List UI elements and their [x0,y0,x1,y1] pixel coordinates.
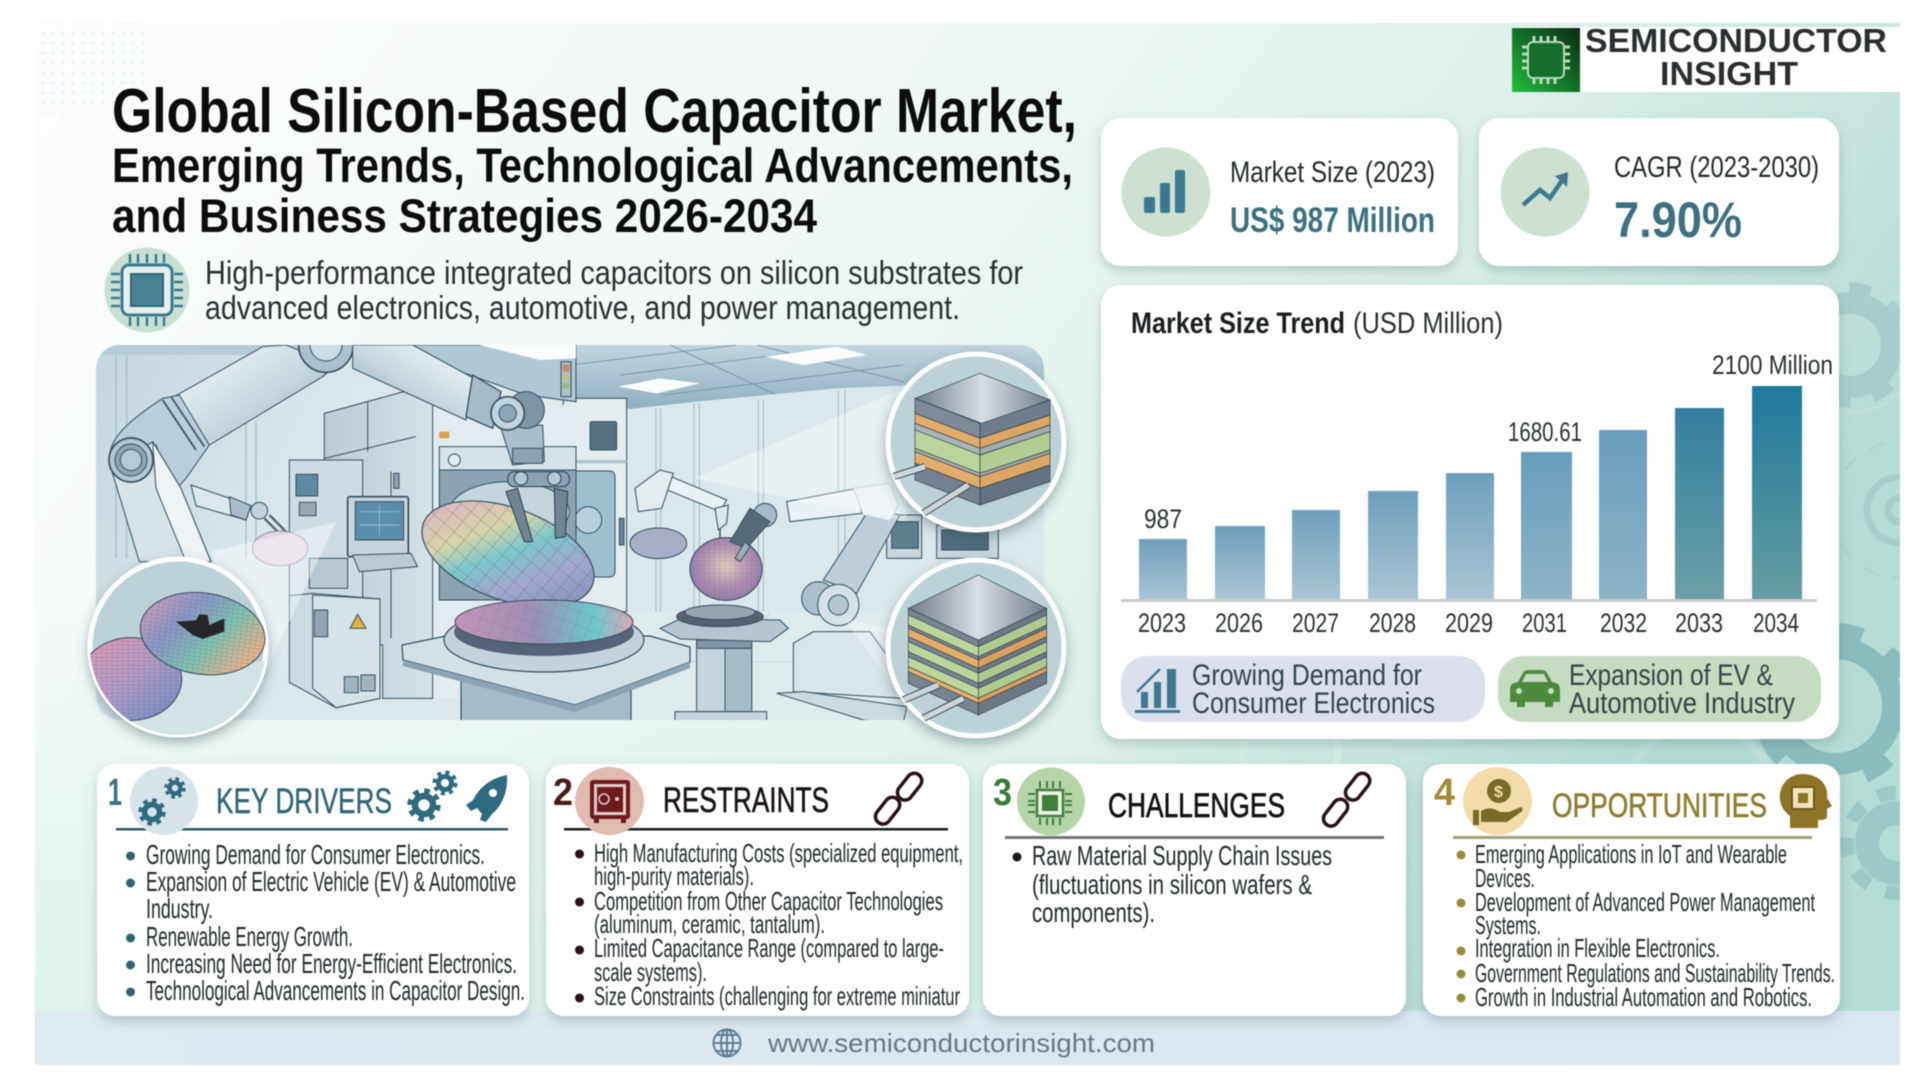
year labels: 2027 [1292,608,1339,638]
year labels: 2031 [1522,608,1567,638]
title: Global Silicon-Based Capacitor Market, [112,77,1077,146]
logo: Semiconductor Insight [1512,22,1900,92]
restraint list [575,838,963,1011]
opportunity list: Integration in Flexible Electronics. [1475,933,1720,963]
magnifier: capacitor layer stack 1 [888,354,1064,530]
icon: chip in circle [104,248,190,332]
icon: bars [1122,148,1210,236]
panel: key drivers: 1 [108,772,122,814]
icon: gears [130,767,198,835]
right wafer [690,538,762,600]
panel: opportunities: 4 [1434,772,1455,814]
year labels: 2034 [1753,608,1799,638]
icon: car [1510,670,1560,707]
big wafer [420,500,596,602]
icon: globe [714,1030,740,1056]
restraint list: scale systems). [594,957,707,987]
driver list [126,839,525,1006]
subtitle: High-performance integrated capacitors on silicon substrates for [205,254,1023,291]
restraint list: (aluminum, ceramic, tantalum). [594,909,825,939]
small arm [668,476,728,510]
left robot tubes [176,345,336,452]
stat card: CAGR: 7.90% [1614,192,1742,248]
magnifier: silicon wafer detail [80,554,276,750]
logo: Semiconductor Insight: INSIGHT [1660,55,1798,92]
title: Emerging Trends, Technological Advancements, [112,140,1073,193]
opportunity list [1456,839,1835,1012]
stat card: CAGR [1479,118,1839,266]
icon: trend arrow [1500,148,1590,236]
subtitle [205,254,1023,326]
restraint list: High Manufacturing Costs (specialized equipment, [594,838,963,868]
panel: restraints [546,764,969,1016]
panel: challenges [983,764,1406,1016]
panel: challenges: 3 [993,772,1012,814]
icon: logo chip [1512,28,1580,92]
value labels: 1680.61 [1508,417,1582,447]
challenge list [1012,840,1332,928]
icon: safe [575,767,644,835]
restraint list: high-purity materials). [594,861,754,891]
right pedestal [697,640,752,712]
stat card: market size [1101,118,1458,266]
year labels: 2033 [1675,608,1723,638]
subtitle: advanced electronics, automotive, and power management. [205,289,960,326]
right robot [793,632,903,698]
logo: Semiconductor Insight: SEMICONDUCTOR [1585,22,1887,59]
pill: growing demand [1121,656,1485,722]
magnifier: capacitor layer stack 2 [888,560,1064,736]
year labels [1138,608,1799,638]
opportunity list: Devices. [1475,863,1535,893]
panel: opportunities: OPPORTUNITIES [1552,787,1767,825]
year labels: 2032 [1600,608,1647,638]
scene right half [630,388,907,723]
restraint list: Size Constraints (challenging for extreme miniatur [594,981,960,1011]
chart heading: (USD Million) [1353,307,1503,340]
chart heading [1131,307,1503,340]
pill: growing demand: Consumer Electronics [1192,687,1435,720]
driver list: Increasing Need for Energy-Efficient Electronics. [146,948,517,979]
chart heading: Market Size Trend [1131,307,1345,340]
icon: green chip [1017,768,1085,836]
wafer stack on chuck [402,600,690,723]
panel: opportunities [1423,764,1840,1016]
value labels [1144,350,1833,534]
panel: restraints: 2 [553,772,573,814]
driver list: Growing Demand for Consumer Electronics. [146,839,485,870]
icon: growth bars [1135,669,1180,713]
icon: broken chain [872,770,925,827]
footer website: www.semiconductorinsight.com [767,1028,1155,1058]
panel: challenges: CHALLENGES [1108,787,1285,825]
driver list: Expansion of Electric Vehicle (EV) & Automotive [146,866,516,897]
icon: gears and rocket [410,773,507,822]
restraint list: Limited Capacitance Range (compared to large- [594,933,944,963]
left light cone [210,522,336,680]
restraint list: Competition from Other Capacitor Technologies [594,886,943,916]
year labels: 2023 [1138,608,1186,638]
gripper [506,472,569,542]
background gears decoration [1333,282,1900,900]
illustration: robotic wafer fab cleanroom [96,318,1050,725]
scene back: ceiling, wall, floor, machine end [562,344,1044,662]
pill: EV expansion: Automotive Industry [1569,687,1795,720]
year labels: 2029 [1445,608,1493,638]
panel: restraints: RESTRAINTS [663,781,829,820]
opportunity list: Systems. [1475,910,1541,940]
top-right tube [297,344,353,374]
scene left half [101,344,578,709]
panel: key drivers: KEY DRIVERS [216,782,392,821]
stat card: market size: Market Size (2023) [1230,156,1435,189]
year labels: 2028 [1369,608,1416,638]
challenge list: components). [1032,897,1155,928]
year labels: 2026 [1215,608,1263,638]
stat card: CAGR: CAGR (2023-2030) [1614,151,1819,184]
title: and Business Strategies 2026-2034 [112,189,817,242]
icon: hand with coin: $ [1494,784,1503,801]
value labels: 2100 Million [1712,350,1833,380]
driver list: Industry. [146,893,213,924]
pill: growing demand: Growing Demand for [1192,659,1422,692]
icon: broken chain [1320,770,1373,829]
pill: EV expansion [1498,656,1821,722]
title [112,77,1077,242]
driver list: Technological Advancements in Capacitor Design. [146,975,525,1006]
challenge list: (fluctuations in silicon wafers & [1032,869,1312,900]
challenge list: Raw Material Supply Chain Issues [1032,840,1332,871]
driver list: Renewable Energy Growth. [146,921,353,952]
pill: EV expansion: Expansion of EV & [1569,659,1773,692]
footer band [35,1011,1900,1065]
bar chart [1121,386,1817,602]
stat card: market size: US$ 987 Million [1230,201,1435,240]
icon: AI head [1780,774,1832,828]
chart panel: market size trend [1101,285,1839,739]
value labels: 987 [1144,504,1182,534]
panel: key drivers [97,764,529,1016]
light cones [693,388,907,522]
icon: hand with coin [1463,767,1532,835]
